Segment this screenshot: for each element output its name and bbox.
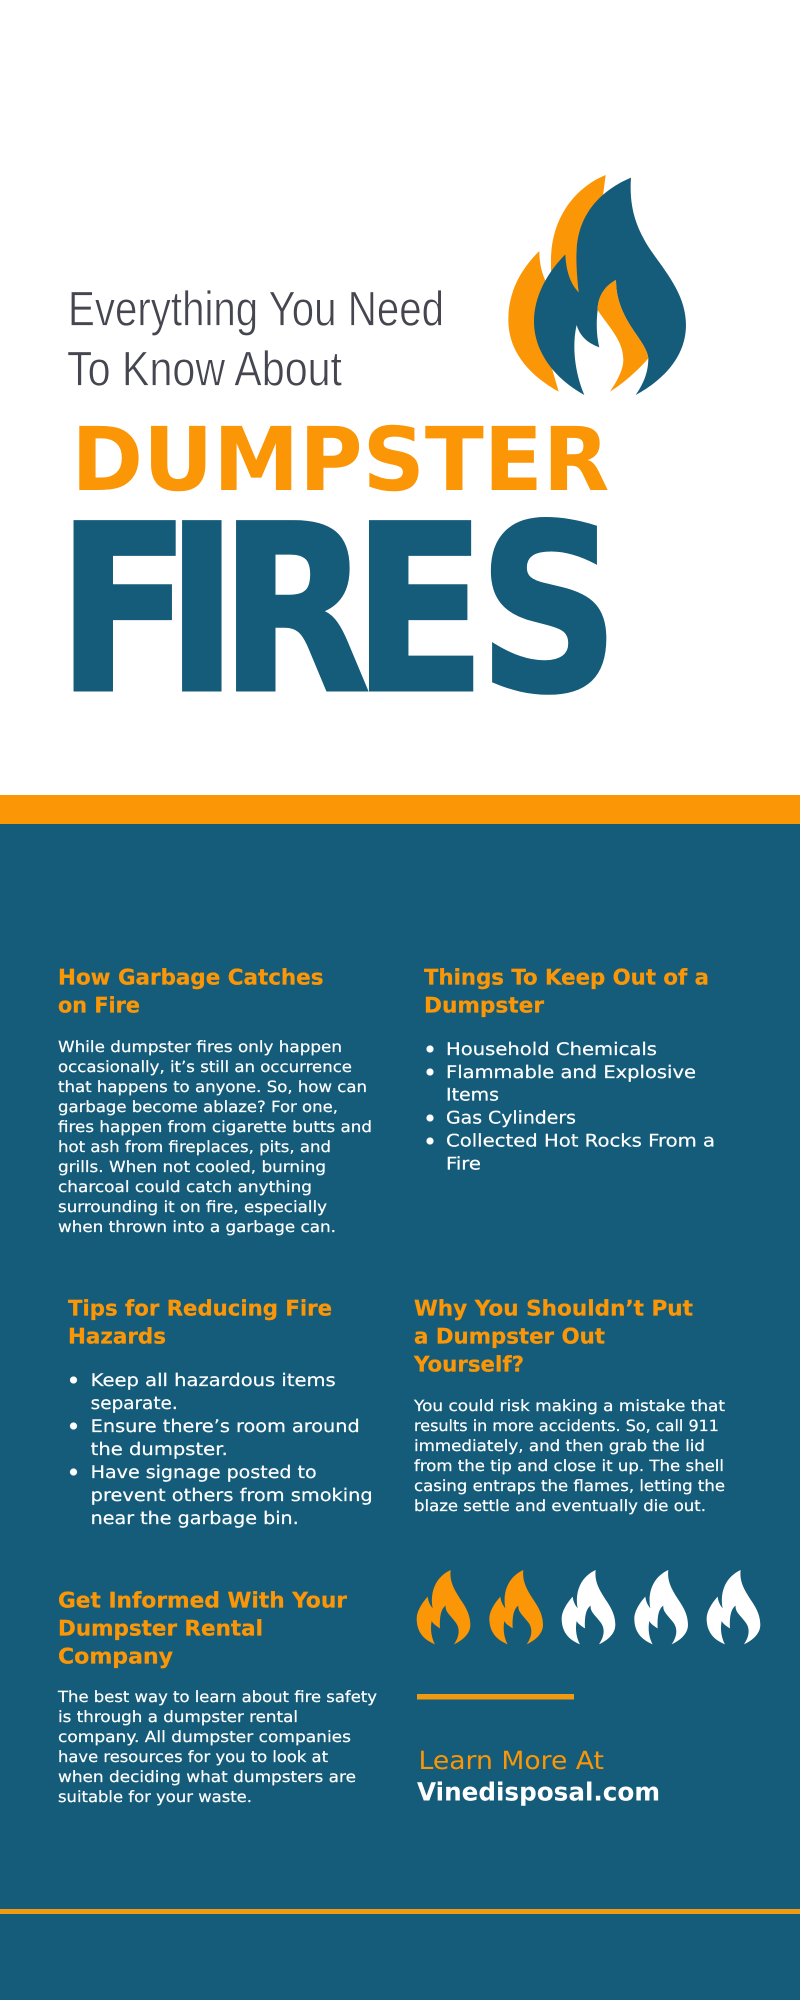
panel: get informed with your dumpster rental company — [57, 1588, 377, 1806]
heading: Tips for Reducing Fire — [68, 1297, 332, 1322]
body text: You could risk making a mistake that — [413, 1397, 725, 1415]
body text: that happens to anyone. So, how can — [58, 1078, 367, 1096]
body text — [58, 1038, 372, 1236]
heading: Why You Shouldn’t Put — [414, 1297, 693, 1322]
heading — [413, 1297, 693, 1378]
subtitle: Everything You Need — [68, 283, 444, 337]
body text: occasionally, it’s still an occurrence — [58, 1058, 352, 1076]
icon: white flame 4 — [634, 1570, 688, 1644]
body text: surrounding it on fire, especially — [58, 1198, 327, 1216]
bullet list: Have signage posted to — [91, 1463, 317, 1483]
learn more label: Learn More At — [418, 1746, 604, 1775]
bullet list: Household Chemicals — [446, 1040, 657, 1060]
heading: a Dumpster Out — [414, 1324, 605, 1349]
body text: While dumpster fires only happen — [58, 1038, 342, 1056]
body text: company. All dumpster companies — [58, 1728, 351, 1746]
heading: Hazards — [68, 1324, 166, 1349]
title: fires: FIRES — [57, 477, 619, 745]
panel: tips for reducing fire hazards — [68, 1297, 373, 1529]
panel: how garbage catches on fire — [58, 966, 372, 1236]
body text: from the tip and close it up. The shell — [414, 1457, 724, 1475]
icon: white flame 5 — [707, 1570, 760, 1644]
heading — [58, 1588, 347, 1669]
panel: why you shouldn't put a dumpster out yourself — [413, 1297, 725, 1515]
bullet list — [70, 1371, 373, 1529]
bullet list: near the garbage bin. — [91, 1509, 299, 1529]
bullet list — [426, 1040, 715, 1175]
body text: casing entraps the flames, letting the — [414, 1477, 725, 1495]
heading: Dumpster Rental — [58, 1616, 263, 1641]
bullet list: separate. — [91, 1394, 178, 1414]
heading: How Garbage Catches — [58, 966, 324, 991]
body text: The best way to learn about fire safety — [57, 1688, 377, 1706]
body text — [57, 1688, 377, 1806]
body text — [413, 1397, 725, 1515]
subtitle — [67, 283, 444, 397]
icon: white flame 3 — [562, 1570, 615, 1644]
bullet list: Gas Cylinders — [446, 1109, 576, 1129]
subtitle: To Know About — [67, 343, 342, 397]
bullet list: Items — [446, 1086, 499, 1106]
body text: fires happen from cigarette butts and — [58, 1118, 372, 1136]
bullet list: Collected Hot Rocks From a — [446, 1132, 715, 1152]
title: dumpster: DUMPSTER — [71, 408, 609, 511]
body text: grills. When not cooled, burning — [58, 1158, 326, 1176]
heading — [424, 966, 709, 1018]
icon row: five flames — [417, 1570, 760, 1644]
icon: orange flame 2 — [489, 1570, 543, 1644]
body text: is through a dumpster rental — [58, 1708, 298, 1726]
panel: things to keep out of a dumpster — [424, 966, 715, 1175]
heading — [58, 966, 324, 1018]
bullet list: Fire — [446, 1155, 481, 1175]
heading: Dumpster — [424, 993, 544, 1018]
icon: orange flame 1 — [417, 1570, 470, 1644]
call to action — [417, 1746, 660, 1807]
body text: have resources for you to look at — [58, 1748, 328, 1766]
icon: large flame — [508, 175, 686, 395]
body text: results in more accidents. So, call 911 — [414, 1417, 719, 1435]
heading: Company — [58, 1644, 173, 1669]
bullet list: prevent others from smoking — [91, 1486, 373, 1506]
footer line — [0, 1909, 800, 1914]
body text: suitable for your waste. — [58, 1788, 252, 1806]
panel: content background — [0, 824, 800, 2000]
panel: header — [0, 0, 800, 795]
heading — [68, 1297, 332, 1349]
heading: Things To Keep Out of a — [424, 966, 709, 991]
heading: on Fire — [58, 993, 140, 1018]
bullet list: Keep all hazardous items — [91, 1371, 336, 1391]
heading: Get Informed With Your — [58, 1588, 347, 1613]
orange band — [0, 795, 800, 824]
body text: when thrown into a garbage can. — [58, 1218, 336, 1236]
bullet list: Ensure there’s room around — [91, 1417, 360, 1437]
body text: hot ash from fireplaces, pits, and — [58, 1138, 331, 1156]
body text: immediately, and then grab the lid — [414, 1437, 705, 1455]
divider line — [417, 1694, 574, 1700]
body text: when deciding what dumpsters are — [58, 1768, 356, 1786]
body text: garbage become ablaze? For one, — [58, 1098, 338, 1116]
website: Vinedisposal.com — [417, 1778, 660, 1807]
bullet list: the dumpster. — [91, 1440, 228, 1460]
bullet list: Flammable and Explosive — [446, 1063, 696, 1083]
body text: blaze settle and eventually die out. — [414, 1497, 706, 1515]
body text: charcoal could catch anything — [58, 1178, 312, 1196]
heading: Yourself? — [413, 1353, 524, 1378]
